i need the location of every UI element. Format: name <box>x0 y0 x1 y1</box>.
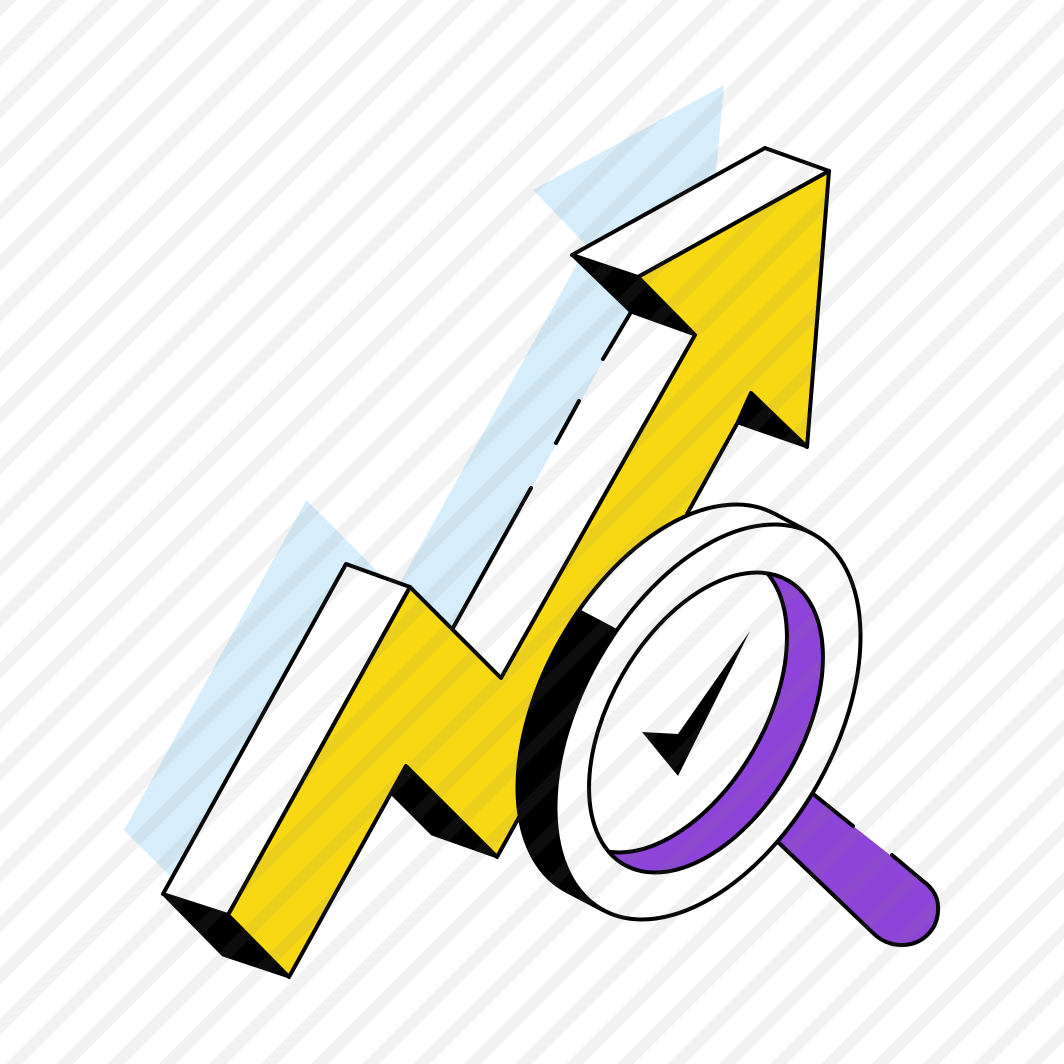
handle <box>770 788 938 945</box>
icon: check mark <box>642 631 750 776</box>
arrow: white side faces <box>163 148 829 915</box>
magnifying glass <box>515 502 940 947</box>
lens rim: back edge and extrusion <box>515 502 813 912</box>
lens interior: purple inner wall <box>541 532 871 913</box>
blue shadow: upper arrow <box>396 85 724 630</box>
lens interior: white glass <box>591 574 789 854</box>
blue shadow: lower arrow <box>124 500 385 876</box>
lens outline <box>541 532 871 913</box>
lens rim: white front ring <box>492 473 924 971</box>
arrow: black shaded facets <box>163 255 807 977</box>
arrow: yellow front face <box>228 171 829 977</box>
